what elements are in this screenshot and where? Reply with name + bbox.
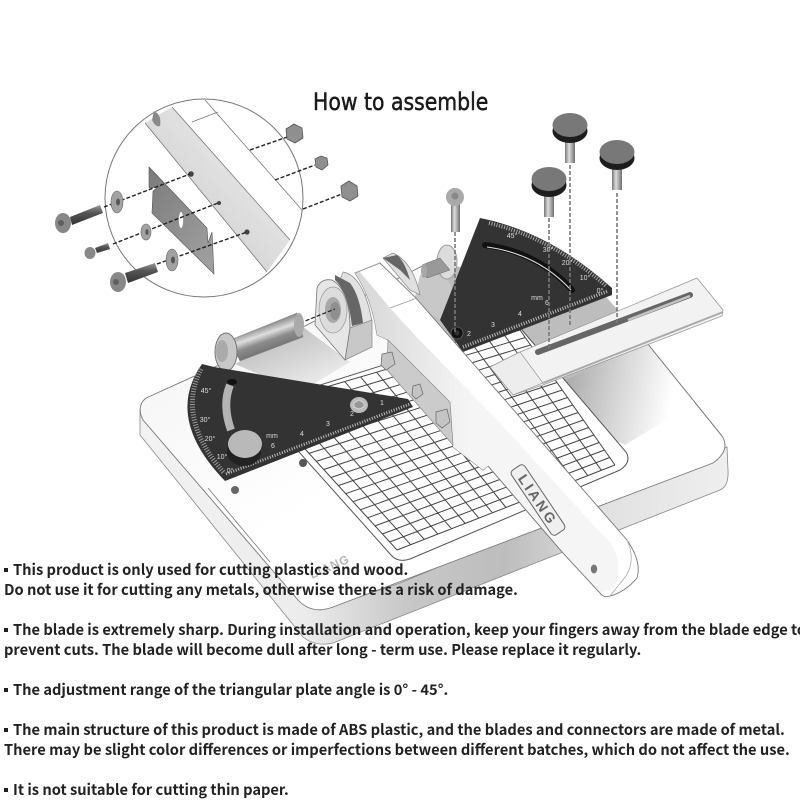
right angle plate: 6 [545, 300, 549, 307]
front face [315, 280, 350, 360]
right angle plate: mm [531, 295, 543, 302]
left angle plate [187, 364, 413, 481]
note: angle range: The adjustment range of the triangular plate angle is 0° - 45°. [13, 679, 448, 700]
left angle plate: mm [266, 433, 278, 440]
knob middle [552, 113, 588, 163]
base plate [140, 262, 728, 644]
knob right [600, 140, 634, 190]
dark slot [335, 275, 363, 326]
note: blade safety [4, 619, 800, 660]
left angle plate: 10° [217, 453, 227, 461]
note: construction: The main structure of this product is made of ABS plastic, and the blades and connectors are made of metal. [13, 719, 785, 740]
title: How to assemble [313, 88, 488, 116]
right angle plate: 2 [467, 331, 471, 338]
cap screw [446, 188, 464, 232]
right angle plate: 4 [518, 311, 522, 318]
right angle plate [440, 218, 612, 352]
note: construction: There may be slight color differences or imperfections between different batches, which do not affect the use. [4, 739, 790, 760]
dashed assembly lines [104, 136, 342, 264]
thumb screws and guides [446, 113, 634, 350]
left angle plate: 2 [350, 411, 354, 418]
mounted blade plate with nuts [381, 340, 453, 445]
cutting grid [257, 325, 628, 560]
blade [149, 167, 214, 274]
block side [345, 320, 372, 360]
knob left [532, 167, 566, 217]
right angle plate: 3 [491, 322, 495, 329]
note: paper: It is not suitable for cutting thin paper. [13, 779, 289, 800]
note: materials: Do not use it for cutting any metals, otherwise there is a risk of damage. [4, 579, 518, 600]
inset arm [145, 100, 302, 272]
right side spacer [383, 245, 458, 320]
left angle plate: 1 [380, 400, 384, 407]
right angle plate: 0° [597, 287, 604, 295]
pin with dashed guide [215, 309, 335, 371]
right angle plate: 30° [543, 246, 553, 254]
nuts [286, 124, 358, 201]
note: construction [4, 719, 790, 760]
note: materials [4, 560, 518, 600]
socket screws [55, 205, 158, 292]
right angle plate: 10° [580, 274, 590, 282]
arm side face [355, 272, 618, 593]
left angle plate: 6 [271, 443, 275, 450]
left angle plate: 30° [200, 416, 210, 424]
arm logo [510, 463, 566, 537]
logo on base: LIANG [308, 552, 352, 582]
right angle plate: 45° [507, 232, 517, 240]
right angle plate: 20° [562, 259, 572, 267]
left angle plate: 20° [205, 435, 215, 443]
arm logo: LIANG [515, 471, 561, 529]
knob on left plate [227, 430, 262, 466]
safety notes [4, 560, 800, 800]
detail inset circle [55, 99, 358, 297]
washers [111, 191, 178, 271]
left angle plate: 3 [326, 421, 330, 428]
slider bar [490, 278, 723, 395]
outer disc [340, 272, 372, 330]
left angle plate: 4 [300, 431, 304, 438]
left angle plate: 45° [201, 387, 211, 395]
pivot block [315, 272, 372, 360]
note: blade safety: The blade is extremely sharp. During installation and operation, keep your fingers away from the blade edge to [13, 619, 800, 640]
note: blade safety: prevent cuts. The blade will become dull after long - term use. Please replace it regularly. [4, 639, 641, 660]
left angle plate: 0° [227, 467, 234, 475]
cutting arm [355, 263, 638, 597]
bolt on left plate [350, 397, 368, 413]
dashed guides [455, 165, 617, 350]
